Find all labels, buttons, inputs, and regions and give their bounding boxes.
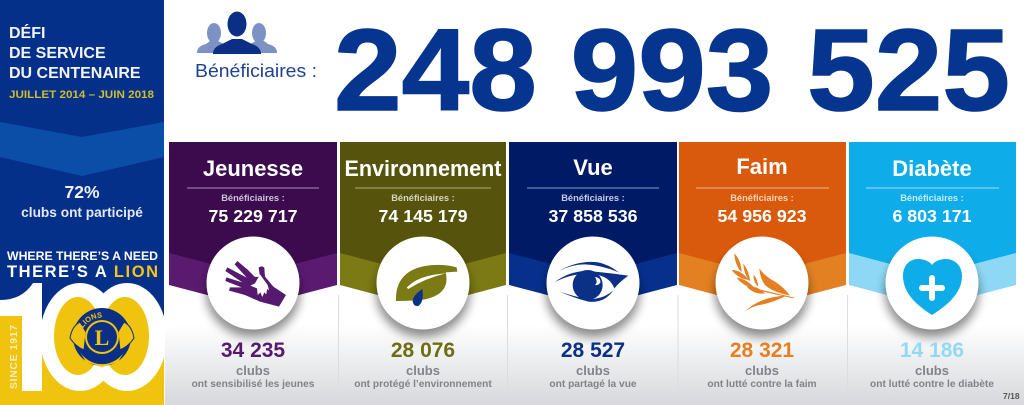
slogan bbox=[7, 249, 158, 281]
beneficiaries count bbox=[718, 193, 807, 226]
panel: Diabète bbox=[849, 142, 1016, 390]
centennial 100 emblem bbox=[0, 283, 164, 405]
beneficiaries count: Bénéficiaires : bbox=[900, 193, 964, 203]
icon: wheat bbox=[732, 253, 794, 313]
icon: lions emblem: INTERNATIONAL bbox=[80, 349, 106, 363]
clubs stat: clubs bbox=[745, 363, 779, 378]
icon: hands bbox=[225, 261, 286, 307]
beneficiaries count bbox=[378, 193, 468, 226]
beneficiaries count: 54 956 923 bbox=[718, 206, 807, 226]
beneficiaries label: Bénéficiaires : bbox=[195, 60, 317, 81]
clubs stat: ont lutté contre le diabète bbox=[870, 379, 994, 390]
clubs stat: 34 235 bbox=[221, 339, 285, 362]
clubs stat: clubs bbox=[406, 363, 440, 378]
sidebar title: DÉFI bbox=[9, 23, 45, 42]
clubs stat: clubs bbox=[236, 363, 270, 378]
clubs stat bbox=[870, 339, 994, 390]
icon: heart with plus bbox=[903, 259, 962, 315]
icon: people bbox=[197, 12, 277, 54]
page number: 7/18 bbox=[1003, 391, 1020, 401]
heading: Jeunesse bbox=[203, 156, 303, 181]
clubs stat bbox=[707, 339, 817, 390]
sidebar panel bbox=[0, 0, 164, 405]
heading: Vue bbox=[573, 155, 613, 180]
panel: Environnement bbox=[340, 142, 506, 390]
clubs stat bbox=[192, 339, 315, 390]
heading: Faim bbox=[736, 154, 788, 179]
clubs stat: clubs bbox=[576, 363, 610, 378]
beneficiaries count: Bénéficiaires : bbox=[730, 193, 794, 203]
clubs stat: ont protégé l’environnement bbox=[354, 379, 492, 390]
clubs stat bbox=[549, 339, 637, 390]
icon: lions emblem: L bbox=[95, 325, 109, 350]
icon: eye bbox=[554, 262, 628, 302]
beneficiaries count: 6 803 171 bbox=[892, 206, 972, 226]
clubs stat: 28 321 bbox=[730, 339, 794, 362]
sidebar title: DE SERVICE bbox=[9, 45, 106, 62]
clubs stat: ont lutté contre la faim bbox=[707, 379, 817, 390]
heading: Diabète bbox=[892, 156, 972, 181]
slogan: THERE’S A LION bbox=[7, 263, 158, 281]
icon: lions emblem bbox=[70, 308, 134, 367]
icon: lions emblem: LIONS bbox=[81, 312, 102, 328]
participation stat: clubs ont participé bbox=[21, 205, 143, 220]
participation stat: 72% bbox=[64, 182, 100, 202]
beneficiaries count: Bénéficiaires : bbox=[221, 193, 285, 203]
total beneficiaries number: 248 993 525 bbox=[334, 5, 1010, 135]
clubs stat: 28 076 bbox=[391, 339, 455, 362]
beneficiaries count bbox=[208, 193, 298, 226]
sidebar chevron band bbox=[0, 122, 164, 176]
since 1917: SINCE 1917 bbox=[9, 325, 20, 389]
participation stat bbox=[21, 182, 143, 220]
clubs stat: 28 527 bbox=[561, 339, 625, 362]
icon: leaf and drop bbox=[396, 265, 457, 306]
panel: Faim bbox=[679, 142, 846, 390]
clubs stat: clubs bbox=[915, 363, 949, 378]
clubs stat bbox=[354, 339, 492, 390]
sidebar title: DU CENTENAIRE bbox=[9, 65, 141, 82]
beneficiaries count: 75 229 717 bbox=[208, 206, 298, 226]
beneficiaries count: Bénéficiaires : bbox=[561, 193, 625, 203]
clubs stat: ont partagé la vue bbox=[549, 379, 637, 390]
panel: Vue bbox=[509, 142, 677, 390]
beneficiaries count: Bénéficiaires : bbox=[391, 193, 455, 203]
slogan: WHERE THERE’S A NEED bbox=[7, 249, 158, 263]
heading: Environnement bbox=[344, 156, 502, 181]
beneficiaries count: 74 145 179 bbox=[378, 206, 468, 226]
clubs stat: 14 186 bbox=[900, 339, 964, 362]
beneficiaries count: 37 858 536 bbox=[548, 206, 638, 226]
beneficiaries count bbox=[548, 193, 638, 226]
beneficiaries count bbox=[892, 193, 972, 226]
separators bbox=[338, 295, 848, 391]
clubs stat: ont sensibilisé les jeunes bbox=[192, 379, 315, 390]
sidebar dates: JUILLET 2014 – JUIN 2018 bbox=[9, 89, 154, 101]
panel: Jeunesse bbox=[169, 142, 337, 390]
